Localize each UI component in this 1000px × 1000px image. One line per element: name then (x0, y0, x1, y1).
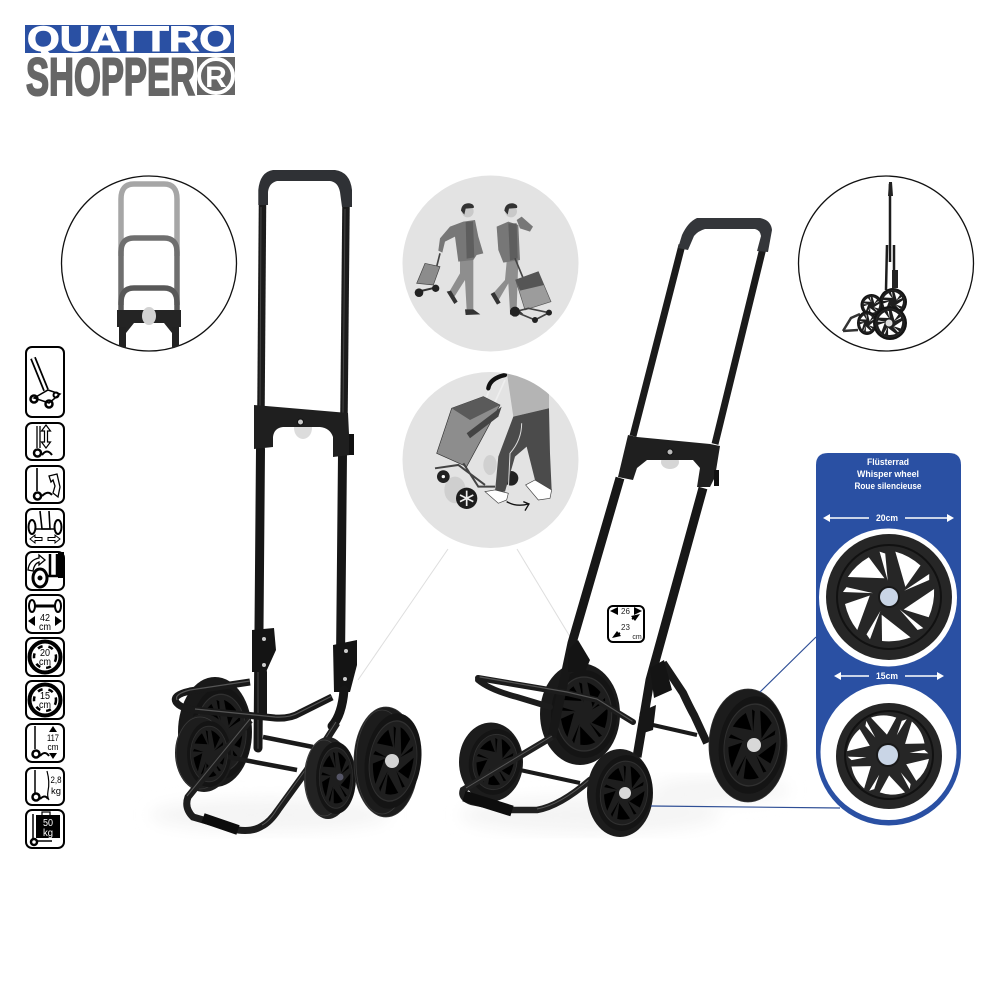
icon: height 117 cm (26, 724, 64, 762)
circle: walking with trolley illustration (402, 176, 578, 352)
lower frame (187, 719, 337, 830)
icon: folding wheel (26, 552, 64, 590)
man pulling small trolley (415, 203, 483, 315)
panel: whisper wheel (816, 453, 961, 826)
icon: wheel 20 cm (26, 638, 64, 676)
telescopic handle (258, 170, 352, 207)
icon: wheel 15 cm (26, 681, 64, 719)
logo: R (205, 61, 227, 94)
dimension: 20cm: 20cm (876, 513, 898, 523)
icon: height 117 cm: 117 (47, 733, 59, 744)
panel heading: Flüsterrad (867, 457, 909, 467)
small wheel (820, 684, 956, 820)
icon: basket size 26 x 23 cm (608, 606, 644, 642)
front wheels (304, 707, 427, 819)
icon: wheel 15 cm: 15 (40, 691, 50, 702)
circle: foot-operated stair climbing illustration (402, 372, 578, 548)
infographic canvas (25, 25, 974, 849)
icon: load 50 kg: 50 (43, 818, 53, 829)
grip (203, 818, 238, 830)
feature icon column (26, 347, 64, 848)
dimension: 15cm (834, 671, 944, 681)
front wheels (587, 689, 791, 837)
lower frame (462, 736, 620, 810)
hinge block (637, 705, 656, 735)
telescopic handle (678, 218, 772, 252)
logo: SHOPPER (26, 48, 195, 107)
thin connector lines to illustration (358, 549, 572, 680)
rear wheels (459, 663, 620, 802)
icon: load 50 kg: kg (43, 828, 53, 839)
callout lines to wheels (651, 637, 840, 808)
circle: handle heights (62, 176, 236, 352)
basket rail (478, 677, 633, 722)
grip (464, 796, 512, 811)
icon: axle 42 cm: 42 (40, 613, 50, 624)
icon: telescopic height (26, 423, 64, 460)
icon: axle 42 cm: cm (39, 622, 51, 633)
axles (520, 725, 697, 783)
rear wheels (175, 677, 252, 792)
icon: axle 42 cm (26, 595, 64, 633)
right trolley (459, 218, 791, 837)
icon: wheel 20 cm: 20 (40, 648, 50, 659)
clamp bracket (254, 405, 354, 457)
floor shadows (150, 778, 790, 833)
panel heading: Whisper wheel (857, 469, 919, 479)
upper tubes (260, 203, 346, 413)
large wheel (819, 528, 957, 666)
logo: QUATTRO (27, 20, 232, 59)
icon: wheel 20 cm: cm (39, 657, 51, 668)
icon: basket size 26 x 23 cm: cm (632, 634, 642, 641)
icon: weight 2,8 kg (26, 768, 64, 805)
icon: basket size 26 x 23 cm: 23 (621, 623, 630, 632)
left trolley (175, 170, 427, 830)
icon: height 117 cm: cm (48, 742, 59, 753)
icon: trolley folded (26, 347, 64, 417)
icon: wheel track width (26, 509, 64, 547)
icon: swivel curve (26, 466, 64, 503)
icon: weight 2,8 kg: kg (51, 786, 61, 797)
icon: wheel 15 cm: cm (39, 700, 51, 711)
icon: weight 2,8 kg: 2,8 (50, 775, 62, 786)
panel heading (854, 457, 922, 491)
dimension: 20cm (823, 513, 954, 523)
dimension: 15cm: 15cm (876, 671, 898, 681)
man on phone with large trolley (491, 203, 552, 323)
panel heading: Roue silencieuse (854, 481, 922, 491)
icon: basket size 26 x 23 cm: 26 (621, 607, 630, 616)
axles (228, 737, 313, 770)
logo (25, 20, 235, 107)
lower tubes and hinges (252, 449, 357, 748)
icon: load 50 kg (26, 810, 64, 848)
lower tubes (552, 478, 707, 757)
upper tubes (633, 245, 763, 444)
circle: side view (798, 176, 974, 351)
clamp bracket (618, 435, 720, 487)
basket rail (175, 681, 332, 718)
